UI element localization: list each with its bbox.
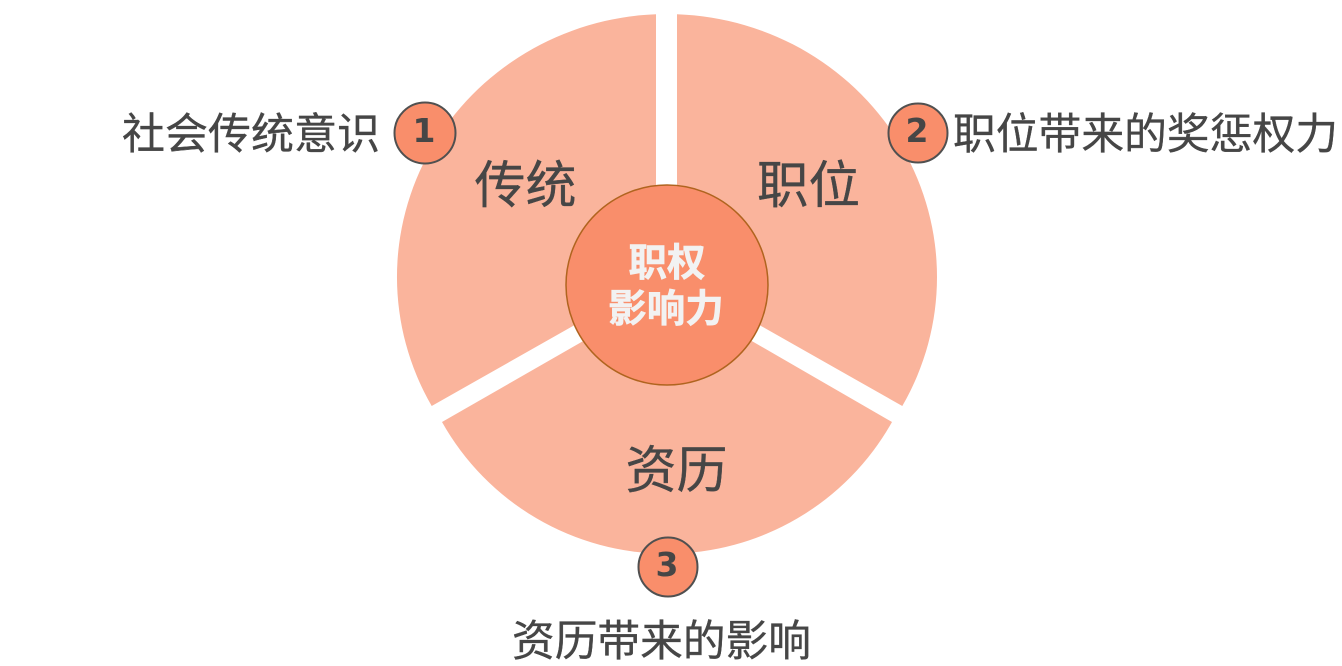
center circle: 职权影响力: 职权 (628, 242, 706, 285)
callout 3: 资历带来的影响 (512, 538, 811, 666)
callout 3: 资历带来的影响: 3 (656, 545, 678, 584)
callout 2: 职位带来的奖惩权力: 2 (906, 111, 928, 150)
callout 2: 职位带来的奖惩权力 (888, 104, 1338, 162)
callout 1: 社会传统意识: 社会传统意识 (122, 111, 380, 159)
center circle: 职权影响力 (566, 185, 768, 385)
ring diagram (397, 14, 937, 554)
callout 1: 社会传统意识: 1 (413, 111, 435, 150)
heading: 资历: 资历 (626, 442, 728, 499)
panel: 传统 sector (397, 14, 656, 406)
center circle: 职权影响力: 影响力 (608, 288, 724, 331)
callout 1: 社会传统意识 (122, 102, 456, 164)
callout 2: 职位带来的奖惩权力: 职位带来的奖惩权力 (953, 111, 1338, 159)
panel: 资历 sector (442, 340, 892, 554)
heading: 职位: 职位 (757, 157, 860, 214)
panel: 职位 sector (677, 14, 937, 406)
heading: 传统: 传统 (474, 157, 576, 214)
callout 3: 资历带来的影响: 资历带来的影响 (512, 618, 811, 666)
